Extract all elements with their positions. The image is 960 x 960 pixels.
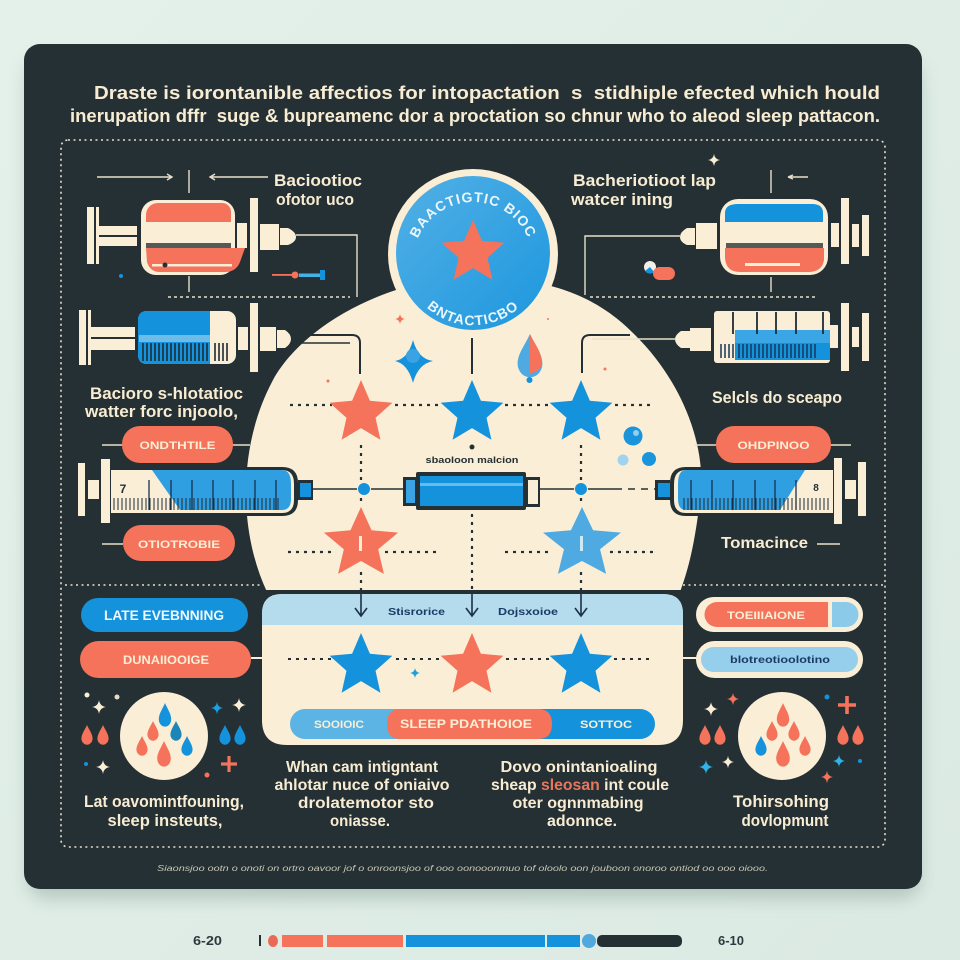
caption: left: sleep insteuts, (108, 812, 222, 830)
star: top row blue center (441, 380, 503, 440)
icon: sparkle and capsule (644, 154, 720, 280)
title (70, 83, 880, 126)
center blue cartridge (403, 472, 540, 510)
pill: coral left: DUNAIIOOIGE (123, 655, 209, 667)
pill: light blue right with cream border (683, 641, 863, 678)
syringe: top left (87, 198, 296, 275)
pill: coral left (80, 641, 262, 678)
connector: top left syringe (97, 170, 357, 297)
panel star coral (441, 633, 503, 693)
icon: left drops circle (120, 692, 208, 780)
pill: upper left: ONDTHTILE (140, 440, 216, 452)
title: inerupation dffr suge & bupreamenc dor a proctation so chnur who to aleod sleep pattacon. (70, 106, 880, 126)
syringe: middle left (79, 303, 291, 372)
dotted frame (61, 140, 885, 847)
panel dotted line (288, 658, 652, 660)
star: top row blue right (550, 380, 612, 440)
caption: right: dovlopmunt (742, 812, 829, 830)
badge (388, 169, 558, 330)
badge ring text bottom: BNTACTICBO (427, 300, 517, 326)
star: second row light blue (543, 507, 621, 574)
segmented pill: SLEEP PDATHOIOE (400, 719, 532, 731)
pill: late evenning (81, 598, 248, 632)
caption: center left: oniasse. (330, 813, 390, 830)
syringe: large right: 8 (813, 483, 819, 494)
badge star (442, 220, 504, 280)
caption: center left: drolatemotor sto (298, 795, 434, 812)
caption: left (84, 793, 244, 830)
label: Tomacince: Tomacince (721, 535, 808, 552)
pill: late evenning: LATE EVEBNNING (104, 607, 224, 623)
caption: center left: ahlotar nuce of oniaivo (274, 777, 450, 794)
label: right sleep: Selcls do sceapo (712, 389, 842, 407)
timeline end label: 6-10 (718, 933, 744, 948)
timeline start label: 6-20 (193, 933, 222, 948)
label: left water: Bacioro s-hlotatioc (90, 385, 243, 403)
arrows into panel (355, 590, 587, 616)
segmented pill: SOOIOIC (314, 719, 364, 731)
pill: upper left (102, 426, 250, 463)
connector: middle left syringe (290, 335, 360, 374)
pill: lower left: OTIOTROBIE (138, 539, 220, 551)
caption: center right: adonnce. (547, 813, 617, 830)
caption: center right (491, 759, 669, 830)
panel header text right: Dojsxoioe (498, 607, 559, 618)
label: top right: watcer ining (570, 191, 673, 209)
caption: center left (274, 759, 450, 830)
panel star blue right (550, 633, 612, 693)
icon: right decorations (699, 693, 864, 783)
panel header text left: Stisrorice (388, 607, 446, 618)
pill: upper right: OHDPINOO (738, 440, 810, 452)
caption: center left: Whan cam intigntant (286, 759, 439, 776)
syringe: large right (655, 458, 866, 524)
icon: small needle (119, 270, 325, 280)
caption: center right: Dovo onintanioaling (500, 759, 658, 776)
syringe: large left (78, 459, 313, 523)
label: top left (274, 172, 362, 209)
label: top right (570, 172, 716, 209)
label: left water: watter forc injoolo, (84, 403, 238, 421)
icon: blue sparkle (395, 340, 433, 383)
label: top right: Bacheriotioot lap (573, 172, 716, 190)
vertical connector (470, 338, 474, 450)
star: second row coral (324, 507, 398, 574)
pill: upper right (695, 426, 851, 463)
syringe: large left: 7 (120, 482, 127, 496)
panel star blue left (330, 633, 392, 693)
connector: middle right syringe (582, 335, 675, 373)
label: top left: Baciootioc (274, 172, 362, 190)
pill: lower left (102, 525, 235, 561)
center cartridge label: sbaoloon malcion (426, 455, 519, 466)
title: Draste is iorontanible affectios for intopactation s stidhiple efected which hould (94, 83, 880, 103)
icon: left decorations (81, 692, 246, 778)
label: top left: ofotor uco (276, 191, 354, 209)
caption: right: Tohirsohing (733, 793, 829, 811)
small diamond (410, 668, 420, 678)
central dome (246, 277, 701, 592)
center connector with dots (313, 482, 655, 496)
star: top row coral (330, 380, 392, 440)
caption: center right: sheap sleosan int coule (491, 777, 669, 794)
footer note: Siaonsjoo ootn o onoti on ortro oavoor jof o onroonsjoo of ooo oonooonmuo tof oloolo oon jouboon onoroo ontiod oo ooo oiooo. (157, 864, 768, 873)
pill: light blue right with cream border: blotreotioolotino (730, 654, 830, 666)
label: left water (84, 385, 243, 421)
icon: right drops circle (738, 692, 826, 780)
icon: two tone drop (518, 334, 542, 383)
segmented pill (290, 709, 655, 739)
icon: small coral diamonds (326, 314, 606, 382)
bottom center panel (262, 590, 683, 745)
pill: coral right with cream border: TOEIIIAIONE (727, 610, 805, 622)
label: Tomacince (721, 535, 840, 552)
bottom timeline (193, 933, 744, 948)
badge ring text top: BAACTIGTIC BIOC (410, 192, 536, 238)
syringe: top right (680, 198, 869, 275)
caption: left: Lat oavomintfouning, (84, 793, 244, 811)
pill: coral right with cream border (696, 597, 863, 632)
icon: water bubbles (618, 426, 656, 466)
caption: center right: oter ognnmabing (512, 795, 644, 812)
connector: top right syringe (585, 170, 815, 297)
caption: right (733, 793, 829, 830)
star network lines (288, 405, 653, 590)
syringe: middle right (675, 303, 869, 371)
segmented pill: SOTTOC (580, 719, 632, 731)
